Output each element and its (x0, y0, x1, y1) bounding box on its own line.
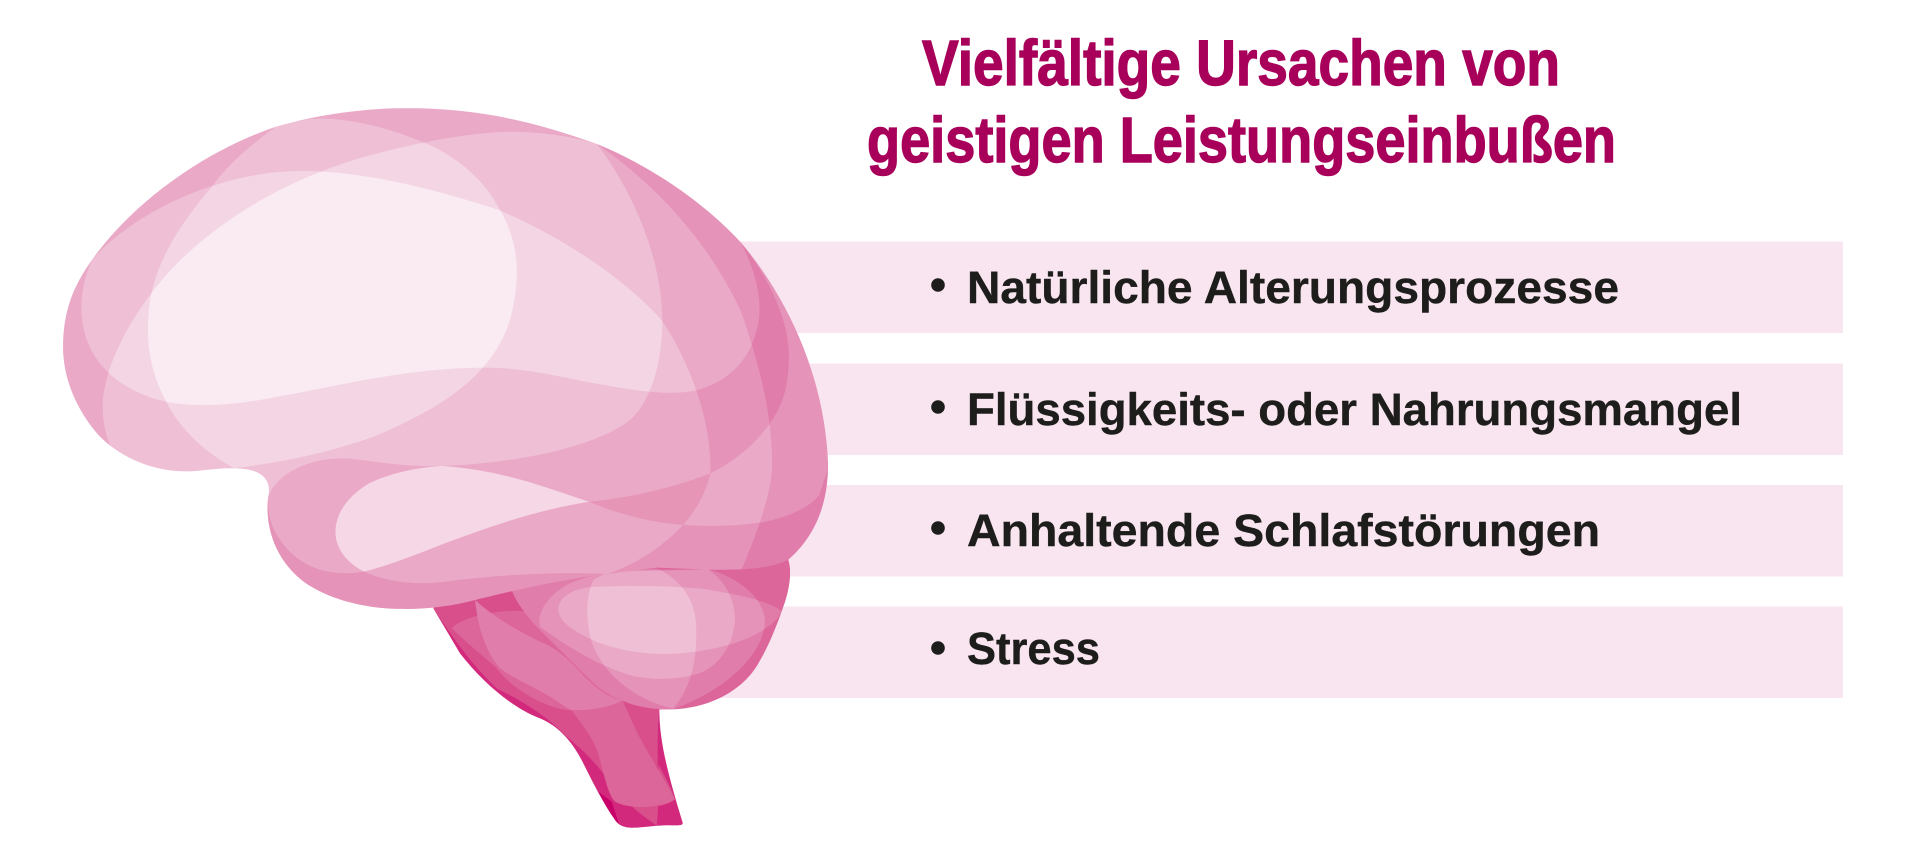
bar 3 (700, 485, 1843, 576)
list item: Natürliche Alterungsprozesse: Natürliche Alterungsprozesse (967, 262, 1619, 313)
list item: Stress: Stress (967, 623, 1100, 674)
panel: list bars (700, 242, 1843, 698)
title: geistigen Leistungseinbußen (867, 104, 1616, 176)
list item: Anhaltende Schlafstörungen: Anhaltende Schlafstörungen (967, 505, 1600, 556)
bar 2 (700, 364, 1843, 455)
icon: brain illustration (63, 108, 828, 828)
list item: Flüssigkeits- oder Nahrungsmangel: Flüssigkeits- oder Nahrungsmangel (967, 384, 1742, 435)
bar 1 (700, 242, 1843, 333)
title (867, 27, 1616, 176)
cerebellum and brain stem (433, 560, 790, 828)
bar 4 (700, 606, 1843, 698)
cerebrum (63, 108, 828, 609)
title: Vielfältige Ursachen von (922, 27, 1560, 99)
